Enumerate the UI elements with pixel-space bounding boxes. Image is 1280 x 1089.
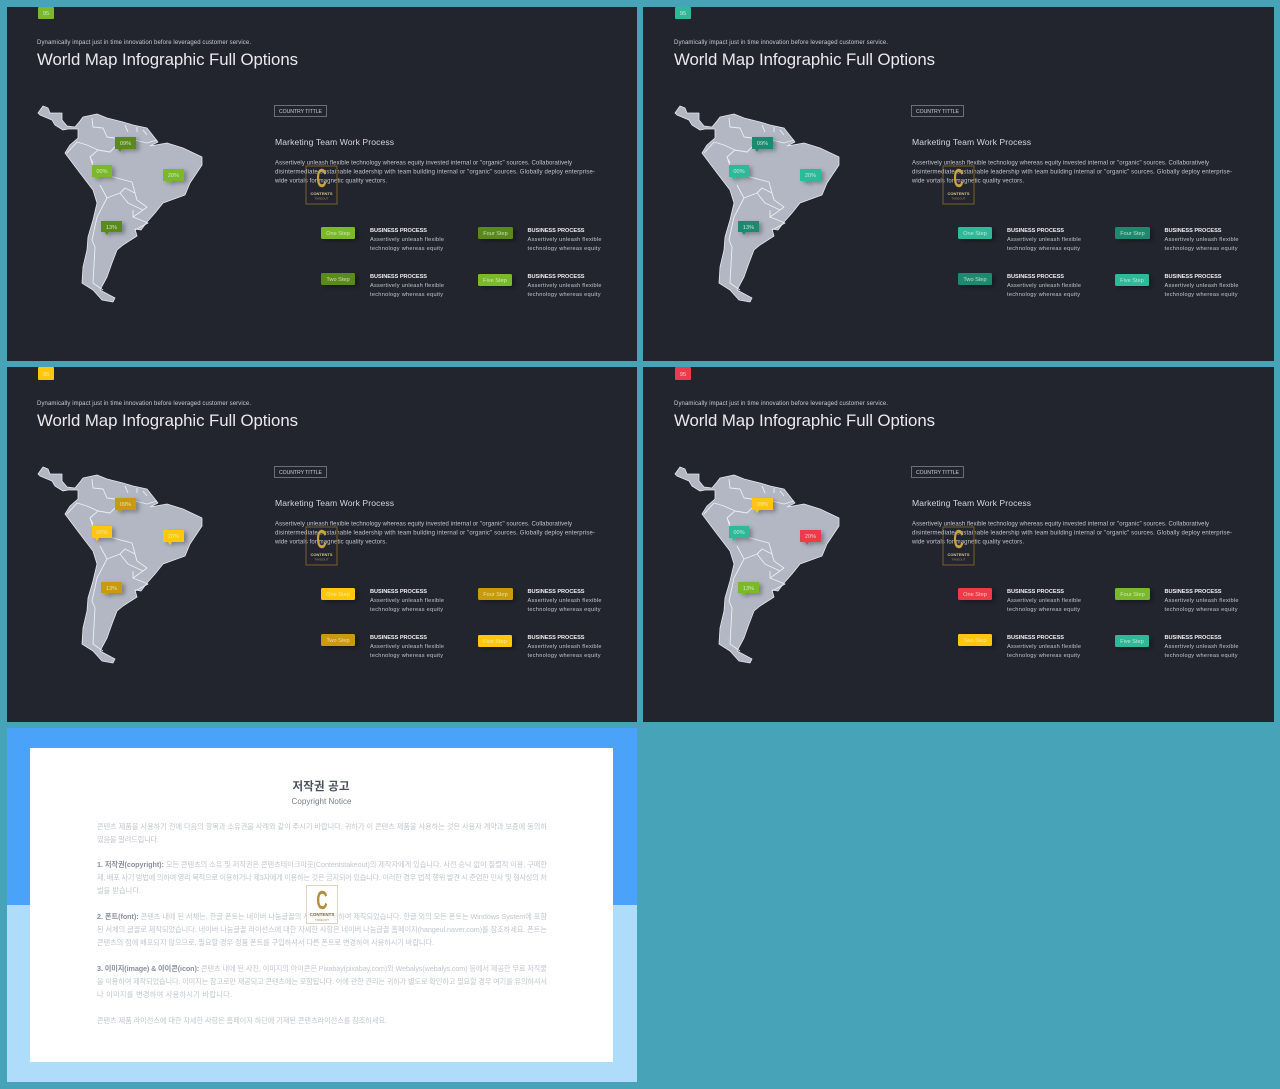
map tag: 13%: 13%: [743, 586, 754, 592]
step: Two Step: BUSINESS PROCESS: [1007, 635, 1064, 641]
badge: slide number: [38, 7, 54, 19]
step: Two Step: Two Step: [963, 277, 987, 283]
notice subtitle: Copyright Notice: [292, 797, 352, 806]
notice section 1: 제, 배포 사기 방법에 의하여 영리 목적으로 이용하거나 제3자에게 이용하는 것은 금지되어 있습니다. 이러한 경우 법적 행위 발견 시 준엄한 민사 및 형사상의 처: [97, 873, 547, 882]
step: Two Step: [958, 634, 1081, 659]
badge: slide number: 95: [43, 372, 49, 378]
step: One Step: Assertively unleash flexible: [1007, 237, 1081, 243]
notice section 2: 2. 폰트(font): 콘텐츠 내에 된 서체는, 한글 폰트는 네이버 나눔글꼴의 서체를 활용하여 제작되었습니다. 한글 외의 모든 폰트는 Windows System에 포함: [97, 912, 547, 921]
step: Two Step: BUSINESS PROCESS: [370, 274, 427, 280]
panel: slide 2 teal: [643, 7, 1274, 361]
badge: slide number: [675, 7, 691, 19]
map: South America: [38, 106, 202, 302]
step: Two Step: [321, 273, 444, 298]
step: Two Step: Assertively unleash flexible: [1007, 283, 1081, 289]
step: Five Step: technology whereas equity: [528, 653, 601, 659]
step: One Step: technology whereas equity: [370, 607, 443, 613]
notice section 2: 된 서체의 글꼴로 제작되었습니다. 네이버 나눔글꼴 라이선스에 대한 자세한 사항은 네이버 나눔글꼴 홈페이지(hangeul.naver.com)를 참조하세요. 폰트는: [97, 925, 547, 934]
map: South America: [675, 467, 839, 663]
step: One Step: BUSINESS PROCESS: [1007, 228, 1064, 234]
watermark logo: CONTENTS: [310, 912, 334, 917]
step: One Step: [958, 227, 1081, 252]
description: wide vortals for magnetic quality vectors.: [911, 540, 1024, 546]
step: Two Step: [958, 273, 1081, 298]
badge: slide number: [675, 367, 691, 380]
step: Five Step: technology whereas equity: [1164, 292, 1238, 298]
map tag: 20%: [800, 169, 821, 184]
badge: slide number: 95: [43, 11, 49, 17]
heading: Marketing Team Work Process: [912, 137, 1031, 147]
country title box: [912, 106, 964, 116]
watermark logo: CONTENTS: [310, 552, 333, 557]
map tag: 13%: 13%: [106, 586, 117, 592]
step: One Step: BUSINESS PROCESS: [1007, 589, 1064, 595]
map: South America: [675, 106, 839, 302]
step: Two Step: technology whereas equity: [1007, 653, 1080, 659]
watermark logo: [943, 165, 974, 204]
step: One Step: technology whereas equity: [1007, 246, 1080, 252]
step: Two Step: Two Step: [963, 638, 987, 644]
step: One Step: One Step: [963, 592, 987, 598]
notice section 1: [97, 860, 547, 895]
watermark logo: CONTENTS: [948, 552, 970, 557]
map tag: 20%: 20%: [805, 534, 816, 540]
subtitle: Dynamically impact just in time innovation before leveraged customer service.: [37, 401, 251, 407]
map tag: 20%: 20%: [168, 173, 179, 179]
watermark logo: C: [316, 165, 327, 193]
step: Five Step: Five Step: [483, 639, 507, 645]
map tag: 09%: 09%: [120, 141, 131, 147]
step: One Step: One Step: [326, 231, 350, 237]
watermark logo: [306, 526, 337, 565]
step: Four Step: Four Step: [483, 592, 508, 598]
step: Two Step: BUSINESS PROCESS: [1007, 274, 1064, 280]
description: [911, 160, 1232, 184]
watermark logo: CONTENTS: [310, 191, 333, 196]
step: Five Step: [1115, 274, 1238, 298]
country title box: [912, 466, 964, 478]
badge: slide number: 95: [680, 372, 686, 378]
country title box: COUNTRY TITTLE: [279, 109, 323, 115]
subtitle: Dynamically impact just in time innovation before leveraged customer service.: [674, 401, 888, 407]
notice section 1: 1. 저작권(copyright): 모든 콘텐츠의 소유 및 저작권은 콘텐츠테이크아웃(Contentstakeout)의 제작자에게 있습니다. 사전 승낙 없이 질렬적 이용, 구매한: [97, 860, 547, 869]
step: Four Step: [478, 588, 602, 613]
step: Four Step: Four Step: [1120, 592, 1145, 598]
step: One Step: [321, 588, 444, 613]
description: disintermediate sustainable leadership with team building internal or "organic" sources. Globally deploy enterprise-: [275, 170, 595, 176]
title: World Map Infographic Full Options: [37, 411, 298, 430]
step: Two Step: Assertively unleash flexible: [370, 644, 444, 650]
description: Assertively unleash flexible technology whereas equity invested internal or "organic" sources. Collaboratively: [275, 522, 572, 528]
watermark logo: [306, 165, 337, 204]
title: World Map Infographic Full Options: [674, 411, 935, 430]
panel: slide 4 multicolour: [643, 367, 1274, 722]
map: South America: [38, 467, 202, 663]
watermark logo: C: [316, 526, 327, 554]
notice footer: 콘텐츠 제품 라이선스에 대한 자세한 사항은 홈페이지 하단에 기재된 콘텐츠라이선스를 참조하세요.: [97, 1016, 387, 1025]
step: One Step: Assertively unleash flexible: [1007, 598, 1081, 604]
description: wide vortals for magnetic quality vectors.: [274, 178, 387, 184]
panel: copyright notice: [7, 728, 637, 1082]
step: Five Step: BUSINESS PROCESS: [1164, 274, 1222, 280]
map tag: 13%: [101, 582, 122, 596]
map tag: 00%: 00%: [96, 169, 108, 175]
notice section 3: 을 이용하여 제작되었습니다. 이미지는 참고로만 제공되고 콘텐츠에는 포함됩니다. 이에 관한 권리는 귀하가 별도로 확인하고 필요할 경우 여기를 유의하셔서: [97, 977, 547, 986]
step: Five Step: BUSINESS PROCESS: [1164, 635, 1222, 641]
step: Four Step: BUSINESS PROCESS: [1164, 589, 1222, 595]
country title box: [274, 106, 326, 116]
notice intro: 였음을 알려드립니다.: [97, 835, 159, 844]
step: Four Step: Four Step: [483, 231, 508, 237]
panel: slide 3 yellow: [7, 367, 637, 722]
step: Four Step: Four Step: [1120, 231, 1145, 237]
notice intro: 콘텐츠 제품을 사용하기 전에 다음의 항목과 소유권을 사례와 같이 주시기 바랍니다. 귀하가 이 콘텐츠 제품을 사용하는 것은 사용자 계약과 보증에 동의하: [97, 822, 547, 831]
step: Five Step: BUSINESS PROCESS: [528, 635, 585, 641]
country title box: COUNTRY TITTLE: [279, 470, 323, 476]
step: One Step: BUSINESS PROCESS: [370, 589, 427, 595]
badge: slide number: 95: [680, 11, 686, 17]
step: Two Step: Two Step: [326, 277, 350, 283]
step: Four Step: BUSINESS PROCESS: [528, 589, 585, 595]
step: One Step: Assertively unleash flexible: [370, 598, 444, 604]
description: Assertively unleash flexible technology whereas equity invested internal or "organic" sources. Collaboratively: [912, 160, 1209, 166]
step: Four Step: Assertively unleash flexible: [1164, 598, 1238, 604]
step: Four Step: technology whereas equity: [528, 607, 601, 613]
watermark logo: [943, 526, 974, 565]
step: Two Step: Assertively unleash flexible: [370, 283, 444, 289]
description: Assertively unleash flexible technology whereas equity invested internal or "organic" sources. Collaboratively: [275, 160, 572, 166]
step: One Step: One Step: [963, 231, 987, 237]
notice section 3: [97, 964, 547, 999]
country title box: COUNTRY TITTLE: [916, 470, 960, 476]
map tag: 00%: [92, 526, 112, 541]
step: Two Step: technology whereas equity: [1007, 292, 1080, 298]
subtitle: Dynamically impact just in time innovation before leveraged customer service.: [674, 40, 888, 46]
title: World Map Infographic Full Options: [674, 50, 935, 69]
step: Four Step: [1115, 588, 1238, 613]
map tag: 13%: [738, 582, 759, 596]
map tag: 09%: 09%: [120, 502, 131, 508]
step: Five Step: Assertively unleash flexible: [1164, 283, 1238, 289]
step: Four Step: technology whereas equity: [1164, 246, 1238, 252]
step: Four Step: technology whereas equity: [528, 246, 601, 252]
step: Two Step: technology whereas equity: [370, 292, 443, 298]
step: Four Step: BUSINESS PROCESS: [1164, 228, 1222, 234]
map tag: 20%: [800, 530, 821, 545]
description: disintermediate sustainable leadership with team building internal or "organic" sources. Globally deploy enterprise-: [912, 530, 1232, 536]
panel: slide 1 green: [7, 7, 637, 361]
map tag: 09%: [752, 137, 773, 152]
watermark logo: TAKEOUT: [315, 196, 329, 200]
title: World Map Infographic Full Options: [37, 50, 298, 69]
notice intro: [97, 822, 547, 844]
notice section 3: 나 이미지를 변경하여 사용하시기 바랍니다.: [97, 990, 232, 999]
step: One Step: BUSINESS PROCESS: [370, 228, 427, 234]
map tag: 00%: [729, 165, 749, 180]
map tag: 13%: [738, 221, 759, 235]
step: One Step: One Step: [326, 592, 350, 598]
notice title: 저작권 공고: [292, 779, 350, 793]
map tag: 13%: [101, 221, 122, 235]
map tag: 00%: [92, 165, 112, 180]
map tag: 20%: [163, 530, 184, 545]
step: Five Step: [478, 274, 602, 298]
step: Two Step: Assertively unleash flexible: [1007, 644, 1081, 650]
step: Four Step: [1115, 227, 1238, 252]
description: [911, 522, 1232, 546]
description: wide vortals for magnetic quality vectors.: [911, 178, 1024, 184]
map tag: 00%: 00%: [733, 530, 745, 536]
map tag: 09%: [115, 498, 136, 513]
watermark logo: TAKEOUT: [952, 196, 966, 200]
step: Four Step: [478, 227, 602, 252]
step: Five Step: Assertively unleash flexible: [1164, 644, 1238, 650]
step: One Step: [321, 227, 444, 252]
map tag: 09%: [115, 137, 136, 152]
map tag: 09%: 09%: [757, 141, 768, 147]
step: Two Step: BUSINESS PROCESS: [370, 635, 427, 641]
country title box: COUNTRY TITTLE: [916, 109, 960, 115]
step: Five Step: [478, 635, 602, 659]
badge: slide number: [38, 367, 54, 380]
notice section 1: 벌을 받습니다.: [97, 886, 141, 895]
map tag: 09%: [752, 498, 773, 513]
description: Assertively unleash flexible technology whereas equity invested internal or "organic" sources. Collaboratively: [912, 522, 1209, 528]
map tag: 00%: 00%: [733, 169, 745, 175]
map tag: 13%: 13%: [106, 225, 117, 231]
step: Five Step: Five Step: [483, 278, 507, 284]
map tag: 00%: 00%: [96, 530, 108, 536]
watermark logo: C: [316, 886, 328, 915]
step: Five Step: Five Step: [1120, 639, 1144, 645]
step: One Step: Assertively unleash flexible: [370, 237, 444, 243]
step: Five Step: technology whereas equity: [528, 292, 601, 298]
notice section 2: 콘텐츠의 점에 배포되지 않으므로, 필요할 경우 정품 폰트를 구입하셔서 다른 폰트로 변경하여 사용하시기 바랍니다.: [97, 938, 434, 947]
step: Five Step: technology whereas equity: [1164, 653, 1238, 659]
step: Four Step: BUSINESS PROCESS: [528, 228, 585, 234]
notice card: [30, 748, 613, 1062]
watermark logo: C: [953, 165, 964, 193]
step: Five Step: Five Step: [1120, 278, 1144, 284]
step: Two Step: [321, 634, 444, 659]
heading: Marketing Team Work Process: [275, 137, 394, 147]
description: wide vortals for magnetic quality vectors.: [274, 540, 387, 546]
step: Two Step: Two Step: [326, 638, 350, 644]
country title box: [274, 466, 326, 478]
step: One Step: technology whereas equity: [370, 246, 443, 252]
notice section 2: [97, 912, 547, 947]
map tag: 09%: 09%: [757, 502, 768, 508]
map tag: 20%: 20%: [805, 173, 816, 179]
description: disintermediate sustainable leadership with team building internal or "organic" sources. Globally deploy enterprise-: [912, 170, 1232, 176]
map tag: 00%: [729, 526, 749, 541]
heading: Marketing Team Work Process: [912, 498, 1031, 508]
subtitle: Dynamically impact just in time innovation before leveraged customer service.: [37, 40, 251, 46]
step: Two Step: technology whereas equity: [370, 653, 443, 659]
map tag: 13%: 13%: [743, 225, 754, 231]
step: One Step: [958, 588, 1081, 613]
watermark logo: TAKEOUT: [315, 558, 329, 562]
watermark logo: C: [953, 526, 964, 554]
step: Five Step: [1115, 635, 1238, 659]
map tag: 20%: 20%: [168, 534, 179, 540]
watermark logo: TAKEOUT: [952, 558, 966, 562]
watermark logo: CONTENTS: [948, 191, 970, 196]
step: Five Step: Assertively unleash flexible: [528, 283, 602, 289]
step: Five Step: BUSINESS PROCESS: [528, 274, 585, 280]
description: disintermediate sustainable leadership with team building internal or "organic" sources. Globally deploy enterprise-: [275, 530, 595, 536]
step: Four Step: Assertively unleash flexible: [528, 598, 602, 604]
step: Four Step: technology whereas equity: [1164, 607, 1238, 613]
step: One Step: technology whereas equity: [1007, 607, 1080, 613]
watermark logo: [306, 886, 338, 924]
description: [274, 522, 595, 546]
watermark logo: TAKEOUT: [315, 918, 329, 922]
description: [274, 160, 595, 184]
step: Four Step: Assertively unleash flexible: [1164, 237, 1238, 243]
map tag: 20%: [163, 169, 184, 184]
step: Five Step: Assertively unleash flexible: [528, 644, 602, 650]
heading: Marketing Team Work Process: [275, 498, 394, 508]
step: Four Step: Assertively unleash flexible: [528, 237, 602, 243]
notice section 3: 3. 이미지(image) & 아이콘(icon): 콘텐츠 내에 된 사진, 이미지의 아이콘은 Pixabay(pixabay.com)와 Webalys(webalys.com) 등에서 제공한 무료 저작물: [97, 964, 547, 973]
